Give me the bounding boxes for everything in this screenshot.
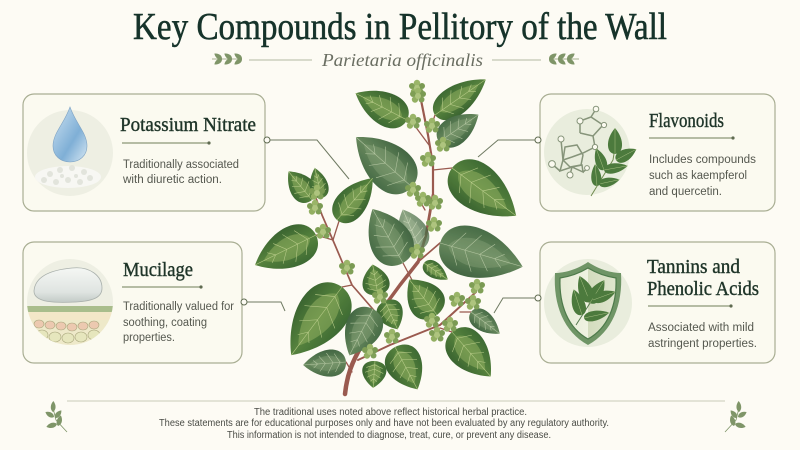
central plant illustration (246, 67, 530, 398)
body text: Traditionally associated (123, 159, 239, 171)
connector lines (247, 140, 535, 313)
body text: Includes compounds (649, 154, 756, 166)
body text: and quercetin. (649, 186, 722, 198)
body text (122, 159, 239, 186)
footer rule (67, 400, 725, 402)
plant stems (316, 95, 476, 394)
footer disclaimer: These statements are for educational purposes only and have not been evaluated by any regulatory authority. (159, 418, 609, 429)
icon: left laurel sprig (44, 401, 67, 432)
icon: gel over skin layers (27, 259, 113, 346)
heading: Flavonoids (649, 110, 724, 132)
body text: Traditionally valued for (123, 301, 234, 313)
flower buds (307, 80, 485, 359)
title: Key Compounds in Pellitory of the Wall (133, 6, 667, 48)
panel: tannins and phenolic acids (535, 242, 775, 363)
body text: such as kaempferol (649, 170, 747, 182)
body text: properties. (123, 332, 175, 344)
icon: water drop on crystals (27, 107, 113, 196)
icon: molecule and sprig (544, 106, 639, 196)
body text: with diuretic action. (122, 174, 222, 186)
panel: flavonoids (535, 94, 775, 211)
footer disclaimer: This information is not intended to diagnose, treat, cure, or prevent any disease. (227, 430, 551, 441)
body text: soothing, coating (123, 317, 207, 329)
panel: mucilage (23, 242, 247, 363)
body text (648, 322, 757, 350)
subtitle: botanical name with ornaments (212, 50, 579, 70)
footer disclaimer: The traditional uses noted above reflect historical herbal practice. (254, 407, 527, 418)
body text: astringent properties. (648, 338, 757, 350)
body text (649, 154, 756, 198)
panel: potassium nitrate (23, 94, 270, 211)
heading: Tannins and (647, 256, 740, 278)
heading (647, 256, 759, 300)
heading: Potassium Nitrate (120, 114, 256, 136)
icon: shield with leaf (544, 259, 632, 347)
divider (648, 304, 733, 308)
divider (649, 136, 735, 140)
footer disclaimer (159, 407, 609, 441)
divider (122, 285, 203, 289)
divider (122, 141, 211, 145)
body text (123, 301, 234, 344)
leaves (246, 67, 530, 398)
heading: Mucilage (123, 259, 193, 281)
subtitle: botanical name with ornaments: Parietaria officinalis (321, 50, 483, 70)
heading: Phenolic Acids (647, 278, 759, 300)
body text: Associated with mild (648, 322, 754, 334)
icon: right laurel sprig (725, 401, 748, 432)
